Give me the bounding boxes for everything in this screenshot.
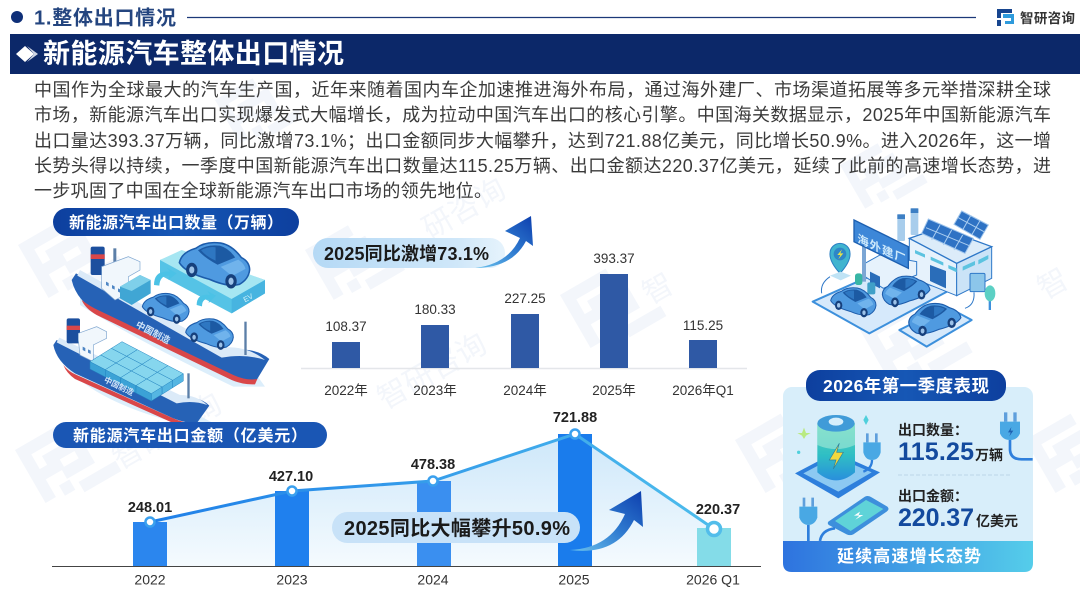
watermark background: [15, 66, 1080, 512]
stat: export value: [898, 488, 1018, 532]
illustration: cargo ships with EVs: 中国制造: [102, 374, 136, 397]
year labels: 2024: [417, 572, 449, 588]
illustration: cargo ships with EVs: [53, 243, 269, 428]
arrow: value growth: [570, 491, 643, 551]
heading pill: export volume: [53, 208, 299, 236]
stat: export value: 220.37: [898, 504, 974, 532]
data points: [146, 430, 720, 536]
panel footer: 延续高速增长态势: [837, 546, 981, 566]
callout: 2025 volume growth: 2025同比激增73.1%: [324, 244, 489, 264]
value labels: 427.10: [269, 469, 313, 485]
year labels: 2022: [134, 572, 166, 588]
year labels: 2025: [558, 572, 590, 588]
body paragraph: 市场，新能源汽车出口实现爆发式大幅增长，成为拉动中国汽车出口的核心引擎。中国海关数据显示，2025年中国新能源汽车: [34, 105, 1051, 125]
callout: 2025 volume growth: [313, 216, 533, 268]
watermark background: 智研咨询: [372, 327, 492, 416]
logo: 智研咨询: [997, 9, 1075, 26]
logo: 智研咨询: 智研咨询: [1020, 10, 1075, 26]
value labels: 248.01: [128, 500, 172, 516]
value labels: 721.88: [553, 410, 597, 426]
bar: 2023: [413, 302, 457, 398]
heading pill: export volume: 新能源汽车出口数量（万辆）: [69, 213, 283, 232]
arrow: volume growth: [475, 216, 533, 268]
value labels: [128, 410, 740, 518]
body paragraph: 中国作为全球最大的汽车生产国，近年来随着国内车企加速推进海外布局，通过海外建厂、市场渠道拓展等多元举措深耕全球: [34, 80, 1051, 100]
illustration: overseas factory: 海外建厂: [857, 232, 906, 267]
watermark background: 智: [637, 267, 679, 311]
value labels: 478.38: [411, 457, 455, 473]
bar: 2024: [503, 291, 547, 398]
title banner: [10, 34, 1080, 74]
combo chart: export value: [52, 410, 761, 588]
bar: 2025: 393.37: [593, 251, 635, 266]
panel heading: 2026年第一季度表现: [823, 376, 989, 396]
panel heading: [806, 370, 1006, 401]
trend line: [150, 434, 714, 529]
bar: 2022: 108.37: [325, 319, 367, 334]
body paragraph: 长势头得以持续，一季度中国新能源汽车出口数量达115.25万辆、出口金额达220.37亿美元，延续了此前的高速增长态势，进: [34, 156, 1051, 176]
body paragraph: 出口量达393.37万辆，同比激增73.1%；出口金额同步大幅攀升，达到721.88亿美元，同比增长50.9%。进入2026年，这一增: [34, 131, 1051, 151]
value labels: 220.37: [696, 502, 740, 518]
stat: export value: 亿美元: [976, 513, 1018, 529]
watermark background: 智: [1032, 262, 1074, 306]
body paragraph: [34, 80, 1051, 201]
heading pill: export value: 新能源汽车出口金额（亿美元）: [73, 426, 307, 445]
heading pill: export value: [53, 422, 327, 448]
bar: 2026 Q1: 115.25: [683, 318, 723, 333]
callout: 2025 value growth: [332, 491, 643, 551]
bar: 2022: [324, 319, 368, 398]
year labels: 2026 Q1: [686, 572, 740, 588]
panel footer: [783, 541, 1033, 572]
year labels: 2023: [276, 572, 308, 588]
illustration: cargo ships with EVs: 中国制造: [134, 319, 173, 346]
icons: battery, phone and plugs: [795, 412, 1033, 541]
callout: 2025 value growth: 2025同比大幅攀升50.9%: [344, 517, 570, 540]
bar: 2025: 2025年: [592, 383, 636, 398]
bar: 2023: 2023年: [413, 383, 457, 398]
bar: 2026 Q1: 2026年Q1: [672, 383, 734, 398]
stat: export volume: [898, 422, 1003, 466]
bar chart: export volume: [301, 251, 747, 398]
illustration: overseas factory: [813, 208, 995, 347]
bar: 2025: [592, 251, 636, 398]
watermark background: 智研咨询: [107, 387, 227, 476]
panel: 2026 Q1 performance: [783, 370, 1033, 572]
year labels: [134, 572, 740, 588]
bar: 2022: 2022年: [324, 383, 368, 398]
section heading: 1.整体出口情况: [34, 6, 176, 30]
bar: 2024: 2024年: [503, 383, 547, 398]
illustration: cargo ships with EVs: EV: [242, 292, 255, 304]
stat: export volume: 万辆: [975, 447, 1003, 463]
body paragraph: 一步巩固了中国在全球新能源汽车出口市场的领先地位。: [34, 181, 492, 201]
watermark background: 研咨询: [417, 172, 511, 246]
bar: 2023: 180.33: [414, 302, 456, 317]
bar: 2024: 227.25: [504, 291, 546, 306]
stat: export volume: 出口数量：: [898, 422, 968, 438]
title banner: 新能源汽车整体出口情况: [43, 39, 344, 69]
bar: 2026 Q1: [672, 318, 734, 398]
stat: export value: 出口金额：: [898, 488, 968, 504]
section heading: [11, 6, 976, 30]
stat: export volume: 115.25: [898, 438, 974, 466]
